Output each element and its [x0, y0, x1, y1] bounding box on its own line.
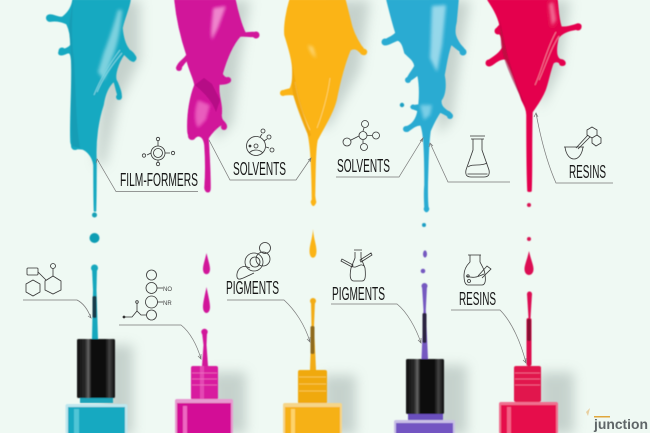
- icon: ring structure left: [26, 264, 61, 296]
- icon: film-former molecule: [142, 137, 175, 166]
- label: solvents 2: SOLVENTS: [337, 155, 390, 176]
- splash: magenta: [175, 0, 260, 192]
- label: pigments 1: PIGMENTS: [226, 277, 279, 298]
- leader lines with arrows: [23, 113, 613, 363]
- bottle: red: [499, 292, 558, 433]
- splash: cyan: [47, 0, 136, 211]
- label: film-formers: FILM-FORMERS: [120, 169, 198, 190]
- splash: yellow: [280, 0, 367, 205]
- icon: mortar and molecule: [564, 127, 601, 159]
- icon: solvent molecule: [246, 129, 274, 156]
- label: resins 1: RESINS: [569, 161, 606, 182]
- falling drops: [90, 203, 534, 313]
- splash: red: [486, 0, 582, 192]
- label: solvents 1: SOLVENTS: [233, 158, 286, 179]
- bottle: purple: [394, 283, 455, 433]
- icon: flask: [466, 136, 489, 177]
- label: pigments 2: PIGMENTS: [332, 283, 385, 304]
- icon: chain molecule: NR: [163, 301, 172, 307]
- bottle: magenta: [175, 329, 233, 433]
- shadows of splashes and bottles: [96, 0, 574, 433]
- icon: chain molecule: [123, 270, 172, 320]
- icon: chain molecule: NO: [163, 287, 172, 293]
- bottle: yellow: [283, 298, 342, 433]
- logo: junction: [586, 408, 648, 432]
- icon: pigment circles: [237, 242, 270, 279]
- icon: resin bottle: [464, 255, 491, 285]
- bottle: cyan: [66, 264, 128, 433]
- icon: solvent branched molecule: [343, 120, 380, 150]
- icon: pigment flask: [341, 250, 372, 281]
- label: resins 2: RESINS: [459, 288, 496, 309]
- logo: junction: junction: [593, 416, 648, 432]
- splash: blue: [382, 0, 466, 212]
